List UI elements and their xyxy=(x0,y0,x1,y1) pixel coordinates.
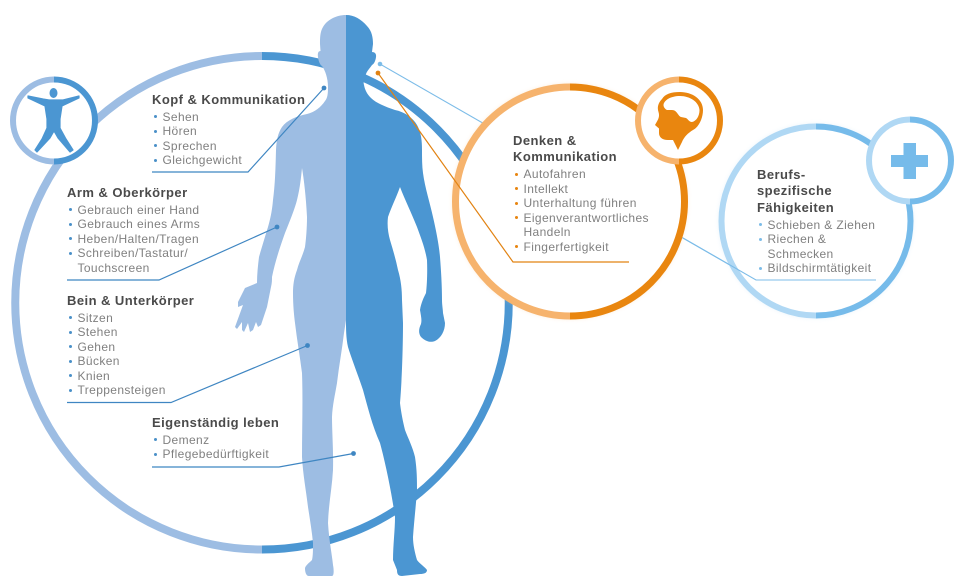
text block: Bein & Unterkörper: Bücken xyxy=(78,354,120,368)
text block: Denken & Kommunikation: Unterhaltung führen xyxy=(524,196,637,210)
text block: Kopf & Kommunikation: Gleichgewicht xyxy=(162,153,242,167)
text block: Arm & Oberkörper: Schreiben/Tastatur/ xyxy=(78,246,188,260)
text block: Berufsspezifische Fähigkeiten: Bildschirmtätigkeit xyxy=(768,261,871,275)
text block: Bein & Unterkörper: Knien xyxy=(78,369,110,383)
text block: Bein & Unterkörper: Treppensteigen xyxy=(78,383,166,397)
text block: Eigenständig leben: Pflegebedürftigkeit xyxy=(162,447,269,461)
text block: Denken & Kommunikation: Handeln xyxy=(524,225,571,239)
text block: Kopf & Kommunikation: Hören xyxy=(162,124,197,138)
large body ring xyxy=(15,56,509,550)
text block: Bein & Unterkörper: Bein & Unterkörper xyxy=(67,292,194,308)
text block: Arm & Oberkörper: Touchscreen xyxy=(78,261,150,275)
text block: Berufsspezifische Fähigkeiten: Fähigkeiten xyxy=(757,200,834,214)
text block: Arm & Oberkörper: Gebrauch eines Arms xyxy=(78,217,200,231)
ring: Denken & Kommunikation xyxy=(453,84,687,318)
text block: Denken & Kommunikation: Kommunikation xyxy=(513,149,617,164)
figure: dark right half xyxy=(346,15,445,576)
text block: Bein & Unterkörper: Stehen xyxy=(78,325,118,339)
text block: Kopf & Kommunikation: Kopf & Kommunikation xyxy=(152,92,305,106)
text block: Denken & Kommunikation xyxy=(513,132,649,254)
leader: Bein & Unterkörper xyxy=(67,343,310,402)
text block: Eigenständig leben: Eigenständig leben xyxy=(152,414,279,430)
text block: Denken & Kommunikation: Intellekt xyxy=(524,182,568,196)
ring: Berufsspezifische Fähigkeiten xyxy=(683,124,913,318)
text block: Bein & Unterkörper: Gehen xyxy=(78,340,115,354)
icon: person with outstretched arms xyxy=(13,80,95,162)
text block: Eigenständig leben: Demenz xyxy=(162,432,209,446)
text block: Kopf & Kommunikation: Sehen xyxy=(162,110,199,124)
leader: Arm & Oberkörper xyxy=(67,225,279,280)
text block: Denken & Kommunikation: Autofahren xyxy=(524,167,586,181)
text block: Denken & Kommunikation: Denken & xyxy=(513,132,577,148)
text block: Berufsspezifische Fähigkeiten xyxy=(757,166,875,275)
leader: Eigenständig leben xyxy=(152,451,356,467)
text block: Eigenständig leben xyxy=(152,414,279,461)
icon: head with brain xyxy=(638,80,720,162)
text block: Kopf & Kommunikation xyxy=(152,92,305,167)
leader: Kopf & Kommunikation xyxy=(152,86,326,172)
text block: Berufsspezifische Fähigkeiten: Schmecken xyxy=(768,247,834,261)
text block: Denken & Kommunikation: Eigenverantwortliches xyxy=(524,211,649,225)
text block: Berufsspezifische Fähigkeiten: spezifische xyxy=(757,183,832,198)
text block: Arm & Oberkörper: Heben/Halten/Tragen xyxy=(78,232,199,246)
text block: Berufsspezifische Fähigkeiten: Berufs- xyxy=(757,166,806,182)
text block: Arm & Oberkörper: Gebrauch einer Hand xyxy=(78,202,199,216)
text block: Arm & Oberkörper: Arm & Oberkörper xyxy=(67,184,188,200)
text block: Bein & Unterkörper: Sitzen xyxy=(78,310,113,324)
icon: plus xyxy=(869,120,951,202)
human figure xyxy=(235,15,445,576)
leader: Denken & Kommunikation xyxy=(376,71,629,262)
figure: light left half xyxy=(235,15,346,576)
text block: Bein & Unterkörper xyxy=(67,292,194,397)
text block: Denken & Kommunikation: Fingerfertigkeit xyxy=(524,240,609,254)
text block: Arm & Oberkörper xyxy=(67,184,200,275)
text block: Berufsspezifische Fähigkeiten: Riechen & xyxy=(768,232,826,246)
text block: Kopf & Kommunikation: Sprechen xyxy=(162,139,217,153)
light blue leader line xyxy=(378,62,756,280)
text block: Berufsspezifische Fähigkeiten: Schieben & Ziehen xyxy=(768,218,875,232)
